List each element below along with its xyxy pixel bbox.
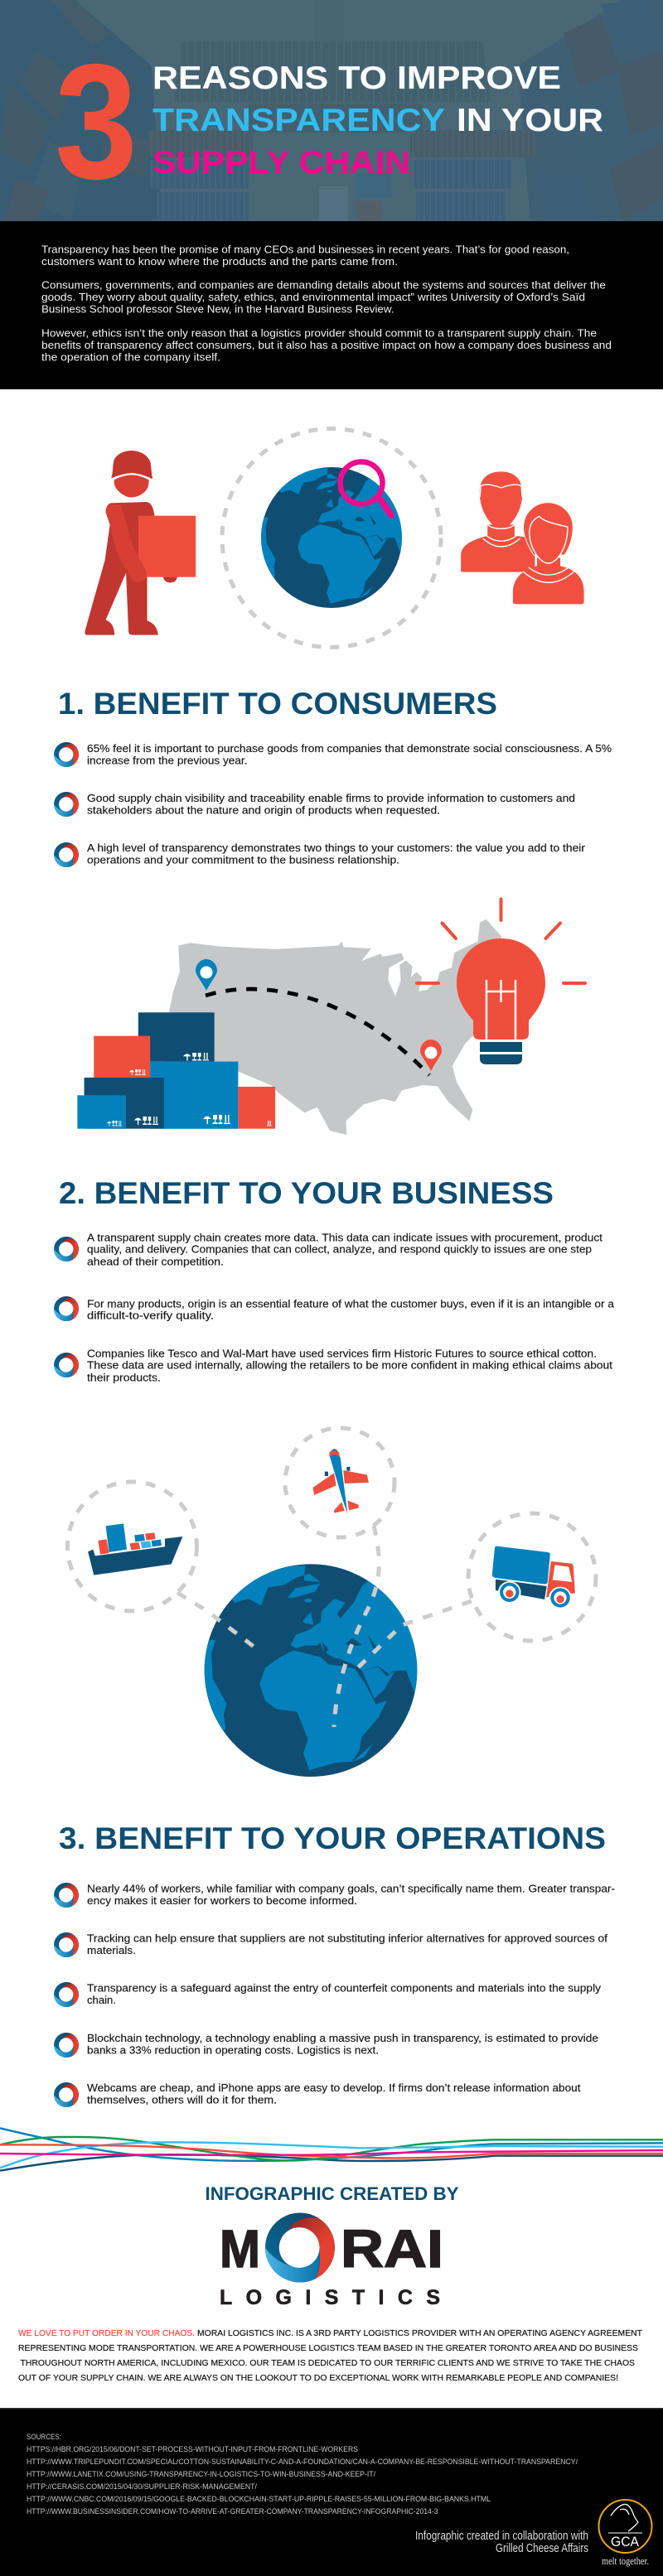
text: point 1 [87,743,612,767]
illustration: map, boxes, bulb [77,900,585,1135]
collaboration credit: Grilled Cheese Affairs [496,2541,588,2555]
title block [55,30,603,213]
heading: benefit to your business: 2. BENEFIT TO YOUR BUSINESS [59,1176,554,1210]
intro text: Consumers, governments, and companies are demanding details about the systems and sources that deliver the [41,278,606,292]
sources list: HTTP://WWW.TRIPLEPUNDIT.COM/SPECIAL/COTTON-SUSTAINABILITY-C-AND-A-FOUNDATION/CAN-A-COMPANY-BE-RESPONSIBLE-WITHOUT-TRANSPARENCY/ [27,2458,578,2466]
text: point 3 [87,1348,613,1383]
dashed ring [222,429,441,648]
icon: magnifier [340,462,391,515]
icon: globe [258,467,409,608]
title line 2 remainder: IN YOUR [457,103,603,138]
sources list: HTTP://WWW.LANETIX.COM/USING-TRANSPARENCY-IN-LOGISTICS-TO-WIN-BUSINESS-AND-KEEP-IT/ [27,2470,375,2478]
Morai Logistics logo [220,2213,443,2309]
section 2 [54,1176,614,1383]
text: point 4 [87,2033,598,2056]
logo ring [265,2213,335,2283]
text: point 5: themselves, others will do it for them. [87,2094,277,2106]
text: point 2: For many products, origin is an essential feature of what the customer buys, even if it is an intangible or a [87,1299,614,1310]
intro text: However, ethics isn’t the only reason that a logistics provider should commit to a transparent supply chain. The [41,326,597,340]
text: point 1: A transparent supply chain creates more data. This data can indicate issues with procurement, product [87,1233,603,1244]
logo letter M: M [220,2219,260,2279]
title line 2 highlight: TRANSPARENCY [152,103,445,138]
intro panel [0,221,663,389]
logo letters RAI: RAI [341,2219,443,2279]
icon: bullet [54,2082,79,2107]
collaboration credit: Infographic created in collaboration with [415,2529,588,2543]
intro text: the operation of the company itself. [41,351,220,363]
icon: bullet [54,1296,79,1321]
GCA logo: melt together. [602,2554,649,2567]
numeral 3: 3 [55,30,138,213]
text: point 1: 65% feel it is important to purchase goods from companies that demonstrate social consciousness. A 5% [87,743,612,755]
footer panel [0,2408,663,2576]
icon: bullet [54,1932,79,1957]
text: point 3: chain. [87,1995,116,2006]
heading: benefit to your operations: 3. BENEFIT TO YOUR OPERATIONS [59,1821,606,1855]
pin: origin [196,959,217,991]
boxes stack [77,1012,275,1129]
icon: bullet [54,792,79,817]
heading: benefit to consumers: 1. BENEFIT TO CONSUMERS [58,687,497,721]
text: point 1: Nearly 44% of workers, while familiar with company goals, can’t specifically name them. Greater transpar- [87,1884,615,1895]
section 1 [54,687,612,867]
icon: light bulb [417,900,585,1064]
tangled supply lines [0,2128,663,2171]
text: point 1: quality, and delivery. Companies that can collect, analyze, and respond quickly to issues are one step [87,1244,592,1256]
dashed ring: plane [285,1428,394,1537]
sources list: HTTP://WWW.CNBC.COM/2016/09/15/GOOGLE-BACKED-BLOCKCHAIN-START-UP-RIPPLE-RAISES-55-MILLION-FROM-BIG-BANKS.HTML [27,2495,491,2503]
sources list: HTTP://WWW.BUSINESSINSIDER.COM/HOW-TO-ARRIVE-AT-GREATER-COMPANY-TRANSPARENCY-INFOGRAPHIC-2014-3 [27,2507,438,2516]
text: point 3: Transparency is a safeguard against the entry of counterfeit components and materials into the supply [87,1983,602,1995]
icon: ship [88,1523,182,1575]
icon: bullet [54,1353,79,1377]
text: point 4: Blockchain technology, a technology enabling a massive push in transparency, is estimated to provide [87,2033,598,2044]
tagline: WE LOVE TO PUT ORDER IN YOUR CHAOS. [18,2329,195,2338]
icon: bullet [54,1982,79,2007]
icon: globe [199,1564,428,1777]
GCA logo [598,2500,651,2567]
dashed ring: truck [468,1513,596,1641]
text: point 3: Companies like Tesco and Wal-Mart have used services firm Historic Futures to source ethical cotton. [87,1348,597,1360]
icon: female consumer [513,503,584,604]
description text [18,2329,643,2383]
text: point 2: Good supply chain visibility and traceability enable firms to provide information to customers and [87,793,575,804]
text: point 2 [87,1933,608,1956]
text: point 3 [87,1983,602,2006]
intro text: Business School professor Steve New, in the Harvard Business Review. [41,303,394,315]
sources list [27,2433,578,2516]
text: point 3: their products. [87,1372,161,1383]
text: point 1: increase from the previous year. [87,755,247,767]
sources list: HTTPS://HBR.ORG/2015/06/DONT-SET-PROCESS-WITHOUT-INPUT-FROM-FRONTLINE-WORKERS [27,2445,358,2453]
text: point 2 [87,793,575,817]
pin: destination [420,1040,442,1071]
text: point 5: Webcams are cheap, and iPhone apps are easy to develop. If firms don’t release information about [87,2082,581,2094]
sources list: SOURCES: [27,2433,61,2441]
icon: delivery worker [85,451,196,635]
description text: REPRESENTING MODE TRANSPORTATION. WE ARE A POWERHOUSE LOGISTICS TEAM BASED IN THE GREATER TORONTO AREA AND DO BUSINESS [18,2344,638,2353]
text: point 2 [87,1299,614,1322]
sources list: HTTP://CERASIS.COM/2015/04/30/SUPPLIER-RISK-MANAGEMENT/ [27,2482,257,2491]
icon: truck [492,1546,575,1609]
text: point 1 [87,1233,603,1267]
text: point 1 [87,1884,615,1907]
title line 3: SUPPLY CHAIN [152,145,410,181]
text: point 3: These data are used internally, allowing the retailers to be more confident in making ethical claims about [87,1360,613,1372]
icon: plane [313,1449,369,1514]
icon: bullet [54,1237,79,1261]
route lines [177,1526,472,1727]
icon: bullet [54,742,79,767]
logo word logistics: LOGISTICS [220,2286,440,2309]
dashed ring: ship [68,1482,197,1611]
illustration: worker, globe, consumers [85,429,584,648]
illustration: global transport [68,1428,596,1777]
icon: bullet [54,2033,79,2057]
text: point 2: difficult-to-verify quality. [87,1310,214,1322]
intro text: customers want to know where the products and the parts came from. [41,255,398,268]
GCA logo: GCA [611,2534,640,2549]
section 3 [54,1821,615,2107]
text: point 3 [87,842,585,866]
header background: container yard [0,0,663,221]
intro text: Transparency has been the promise of many CEOs and businesses in recent years. That’s for good reason, [41,244,569,255]
description text: THROUGHOUT NORTH AMERICA, INCLUDING MEXICO. OUR TEAM IS DEDICATED TO OUR TERRIFIC CLIENTS AND WE STRIVE TO TAKE THE CHAOS [20,2359,635,2368]
text: point 5 [87,2082,581,2106]
icon: bullet [54,1883,79,1908]
text: point 2: Tracking can help ensure that suppliers are not substituting inferior alternatives for approved sources of [87,1933,608,1945]
text: point 4: banks a 33% reduction in operating costs. Logistics is next. [87,2044,379,2056]
text: point 2: materials. [87,1945,136,1956]
title line 1: REASONS TO IMPROVE [152,60,561,96]
credit heading: INFOGRAPHIC CREATED BY [206,2183,459,2204]
intro text: goods. They worry about quality, safety, ethics, and environmental impact” writes University of Oxford’s Saïd [41,291,585,303]
text: point 3: operations and your commitment to the business relationship. [87,855,399,866]
US map [169,919,507,1135]
text: point 3: A high level of transparency demonstrates two things to your customers: the value you add to their [87,842,585,854]
intro text [41,244,612,363]
text: point 1: ency makes it easier for workers to become informed. [87,1895,357,1907]
company description [18,2329,643,2383]
text: point 2: stakeholders about the nature and origin of products when requested. [87,805,440,817]
intro text: benefits of transparency affect consumers, but it also has a positive impact on how a company does business and [41,339,612,351]
description text: MORAI LOGISTICS INC. IS A 3RD PARTY LOGISTICS PROVIDER WITH AN OPERATING AGENCY AGREEMENT [197,2329,643,2338]
collaboration credit [415,2529,588,2555]
text: point 1: ahead of their competition. [87,1256,224,1267]
icon: male consumer [461,471,535,572]
icon: bullet [54,842,79,867]
description text: OUT OF YOUR SUPPLY CHAIN. WE ARE ALWAYS ON THE LOOKOUT TO DO EXCEPTIONAL WORK WITH REMARKABLE PEOPLE AND COMPANIES! [18,2374,618,2383]
route line [206,989,429,1075]
